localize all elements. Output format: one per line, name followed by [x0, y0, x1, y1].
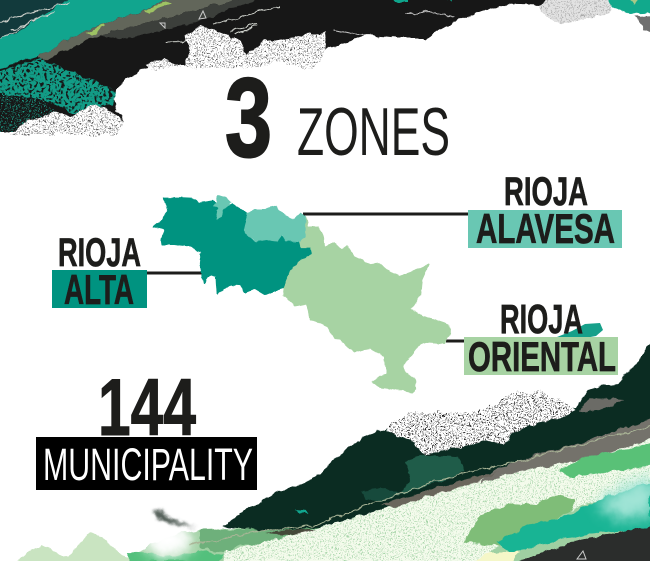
white speckled edges: [10, 25, 327, 135]
map of La Rioja zones: [153, 195, 450, 392]
heading: zones: ZONES: [297, 94, 450, 170]
right top fragments: [538, 0, 612, 23]
top torn collage band: [0, 0, 650, 135]
label: Rioja Alta: [52, 231, 147, 313]
green field and teal water: [463, 494, 575, 546]
bottom torn collage band: [10, 336, 650, 561]
label: Rioja Alavesa: [468, 170, 622, 252]
pale speckled fields: [220, 435, 650, 561]
region: Rioja Alta: [153, 198, 312, 294]
label: Rioja Alta: RIOJA: [58, 231, 141, 275]
label: Rioja Alavesa: RIOJA: [504, 170, 588, 214]
dark rocks bottom right: [507, 525, 650, 561]
label: Rioja Oriental: [464, 296, 618, 380]
dark green hillside: [223, 336, 650, 531]
label: Rioja Alta: ALTA: [64, 266, 134, 313]
stat: municipalities: [36, 363, 257, 490]
region: Rioja Oriental: [283, 217, 450, 392]
stat: municipalities: 144: [98, 363, 196, 453]
stat: municipalities: MUNICIPALITY: [43, 439, 253, 490]
triangle marks top: [160, 11, 206, 28]
region: Rioja Alavesa: [214, 195, 306, 242]
teal blot behind oriental label: [557, 323, 603, 338]
triangle mark bottom: [577, 551, 586, 559]
leader lines: [146, 212, 469, 342]
label: Rioja Oriental: RIOJA: [500, 296, 583, 342]
big number 3: 3: [225, 55, 272, 180]
teal dotted forest: [0, 58, 115, 113]
soft green base bottom-left: [120, 440, 650, 561]
white speckled ridge: [387, 392, 577, 455]
grey strata: [480, 418, 650, 482]
